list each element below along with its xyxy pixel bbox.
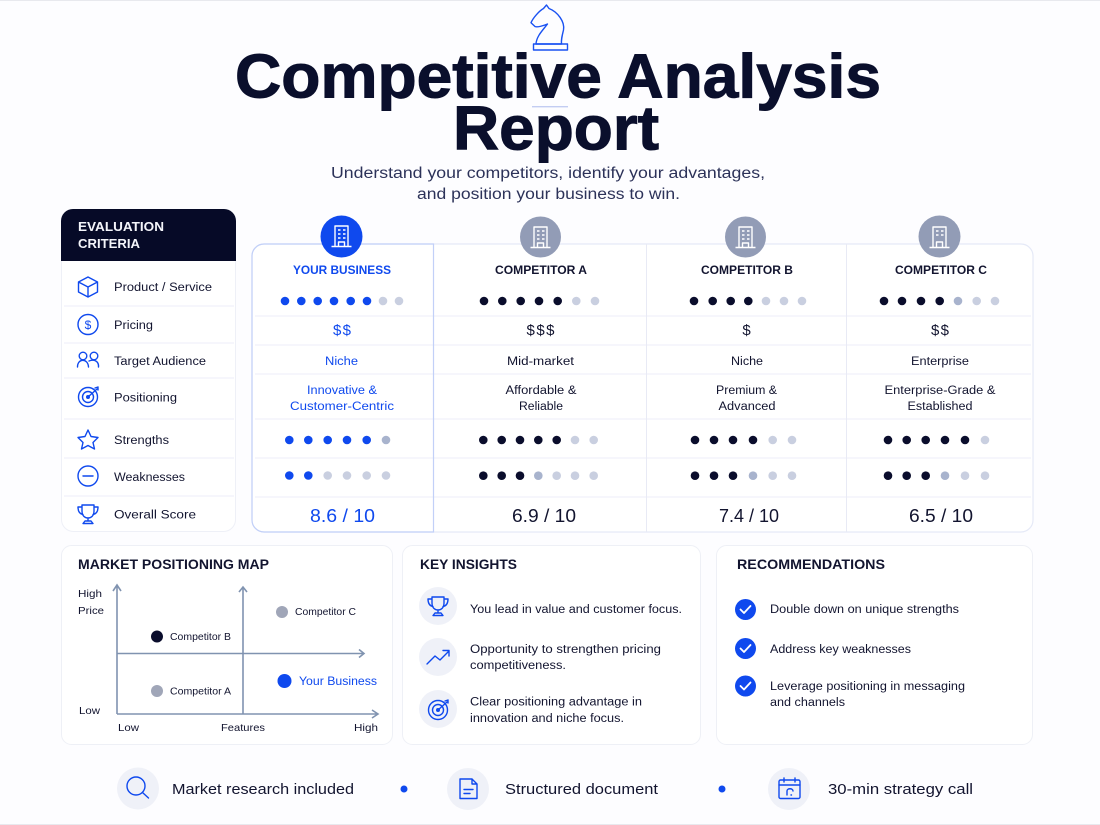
column: competitor b: Advanced [718,401,776,413]
criterion: overall score: Overall Score [114,510,196,522]
column: competitor a: 6.9 / 10 [512,506,576,526]
axis labels: Low [79,705,100,717]
chart axes [113,585,378,718]
column: competitor c: 6.5 / 10 [909,506,973,526]
column: competitor c: Established [908,401,972,413]
column: competitor c: Enterprise [911,356,969,368]
subtitle: Understand your competitors, identify your advantages, [331,165,765,182]
column: competitor a [479,216,599,526]
icon: chess knight [531,5,568,50]
icon: building blue [320,216,362,258]
footer: structured document: Structured document [505,782,658,798]
criterion: strengths [78,430,169,449]
recommendation: strengths: Double down on unique strengths [770,604,959,616]
column: competitor b [690,216,806,526]
point: competitor b [151,630,231,643]
axis labels: High [354,722,378,734]
criteria header: EVALUATION [78,219,164,234]
criterion: weaknesses [78,466,185,486]
insight: positioning advantage: innovation and niche focus. [470,713,624,725]
insight: positioning advantage: Clear positioning advantage in [470,696,642,708]
panel: evaluation criteria [61,209,236,532]
criterion: overall score [78,505,196,524]
column: your business [281,216,403,526]
criterion: positioning [78,387,177,406]
column: your business: YOUR BUSINESS [293,265,391,277]
rating dots: product [480,297,599,305]
recommendation: messaging: and channels [770,697,845,709]
criterion: product / service [78,277,212,297]
panel: market positioning map: MARKET POSITIONING MAP [78,557,269,572]
recommendation: weaknesses [735,638,911,659]
insight: pricing opportunity: competitiveness. [470,660,566,672]
rating dots: strengths [479,436,598,444]
footer: structured document [447,768,658,810]
footer: market research: Market research included [172,782,354,798]
column: your business: Customer-Centric [290,401,394,413]
column: competitor a: Mid-market [507,356,575,368]
column: competitor c: Enterprise-Grade & [884,385,996,397]
column: your business: 8.6 / 10 [310,506,375,526]
insight: positioning advantage [419,690,642,728]
title: Competitive Analysis [235,42,881,112]
insight: value lead [419,587,682,625]
panel: market positioning map [62,546,392,744]
recommendation: weaknesses: Address key weaknesses [770,644,911,656]
title [235,42,881,164]
icon: building grey a [520,216,561,258]
rating dots: strengths [691,436,796,444]
criterion: pricing: $ [85,318,92,332]
axis labels: High [78,588,102,600]
panel: comparison table [252,216,1033,532]
point: competitor c: Competitor C [295,607,356,618]
column: competitor c [880,216,999,526]
column: competitor b: $ [742,322,751,339]
rating dots: strengths [285,436,390,444]
axis labels: Price [78,605,104,617]
recommendation: messaging [735,676,965,709]
point: your business [278,674,377,688]
footer: strategy call [768,768,973,810]
subtitle: and position your business to win. [417,186,680,203]
column: competitor c: $$ [931,322,950,339]
icon: building grey c [918,216,960,258]
panel: recommendations [716,546,1032,744]
column: your business: $$ [333,322,352,339]
rating dots: weaknesses [691,471,796,480]
panel: key insights: KEY INSIGHTS [420,557,517,572]
column: competitor a: Reliable [519,401,563,413]
column: competitor b: 7.4 / 10 [719,506,779,526]
column: competitor b: Premium & [716,385,777,397]
rating dots: weaknesses [285,471,390,480]
rating dots: weaknesses [884,471,989,480]
axis labels: Features [221,722,265,734]
criteria header [61,209,236,261]
criteria header: CRITERIA [78,236,141,251]
criterion: target audience [78,352,206,368]
footer: strategy call: 30-min strategy call [828,782,973,798]
point: competitor c [276,606,356,618]
rating dots: product [880,297,999,305]
rating dots: product [281,297,403,305]
column: competitor a: COMPETITOR A [495,265,587,277]
rating dots: product [690,297,806,305]
recommendation: strengths [735,599,959,620]
recommendation: messaging: Leverage positioning in messaging [770,681,965,693]
footer: market research [117,768,354,810]
point: competitor a: Competitor A [170,686,231,698]
criterion: pricing [78,314,153,334]
column: your business: Innovative & [307,385,377,397]
rating dots: weaknesses [479,471,598,480]
insight: pricing opportunity [419,638,661,676]
axis labels [78,588,378,734]
criterion: positioning: Positioning [114,392,177,404]
point: competitor a [151,685,231,698]
criterion: target audience: Target Audience [114,356,206,368]
column: competitor a: $$$ [526,322,555,339]
criterion: product / service: Product / Service [114,282,212,294]
icon: building grey b [725,216,766,258]
subtitle [331,165,765,203]
title: Report [453,94,659,164]
column: competitor c: COMPETITOR C [895,265,987,277]
column: competitor b: COMPETITOR B [701,265,793,277]
insight: pricing opportunity: Opportunity to strengthen pricing [470,644,661,656]
criterion: pricing: Pricing [114,320,153,332]
axis labels: Low [118,722,139,734]
point: your business: Your Business [299,676,377,688]
column: competitor b: Niche [731,356,763,368]
point: competitor b: Competitor B [170,632,231,643]
column: competitor a: Affordable & [506,385,577,397]
panel: key insights [402,546,700,744]
column: your business: Niche [325,356,358,368]
criterion: strengths: Strengths [114,435,169,447]
insight: value lead: You lead in value and customer focus. [470,604,682,616]
criterion: weaknesses: Weaknesses [114,472,185,484]
panel: recommendations: RECOMMENDATIONS [737,557,885,572]
rating dots: strengths [884,436,989,444]
